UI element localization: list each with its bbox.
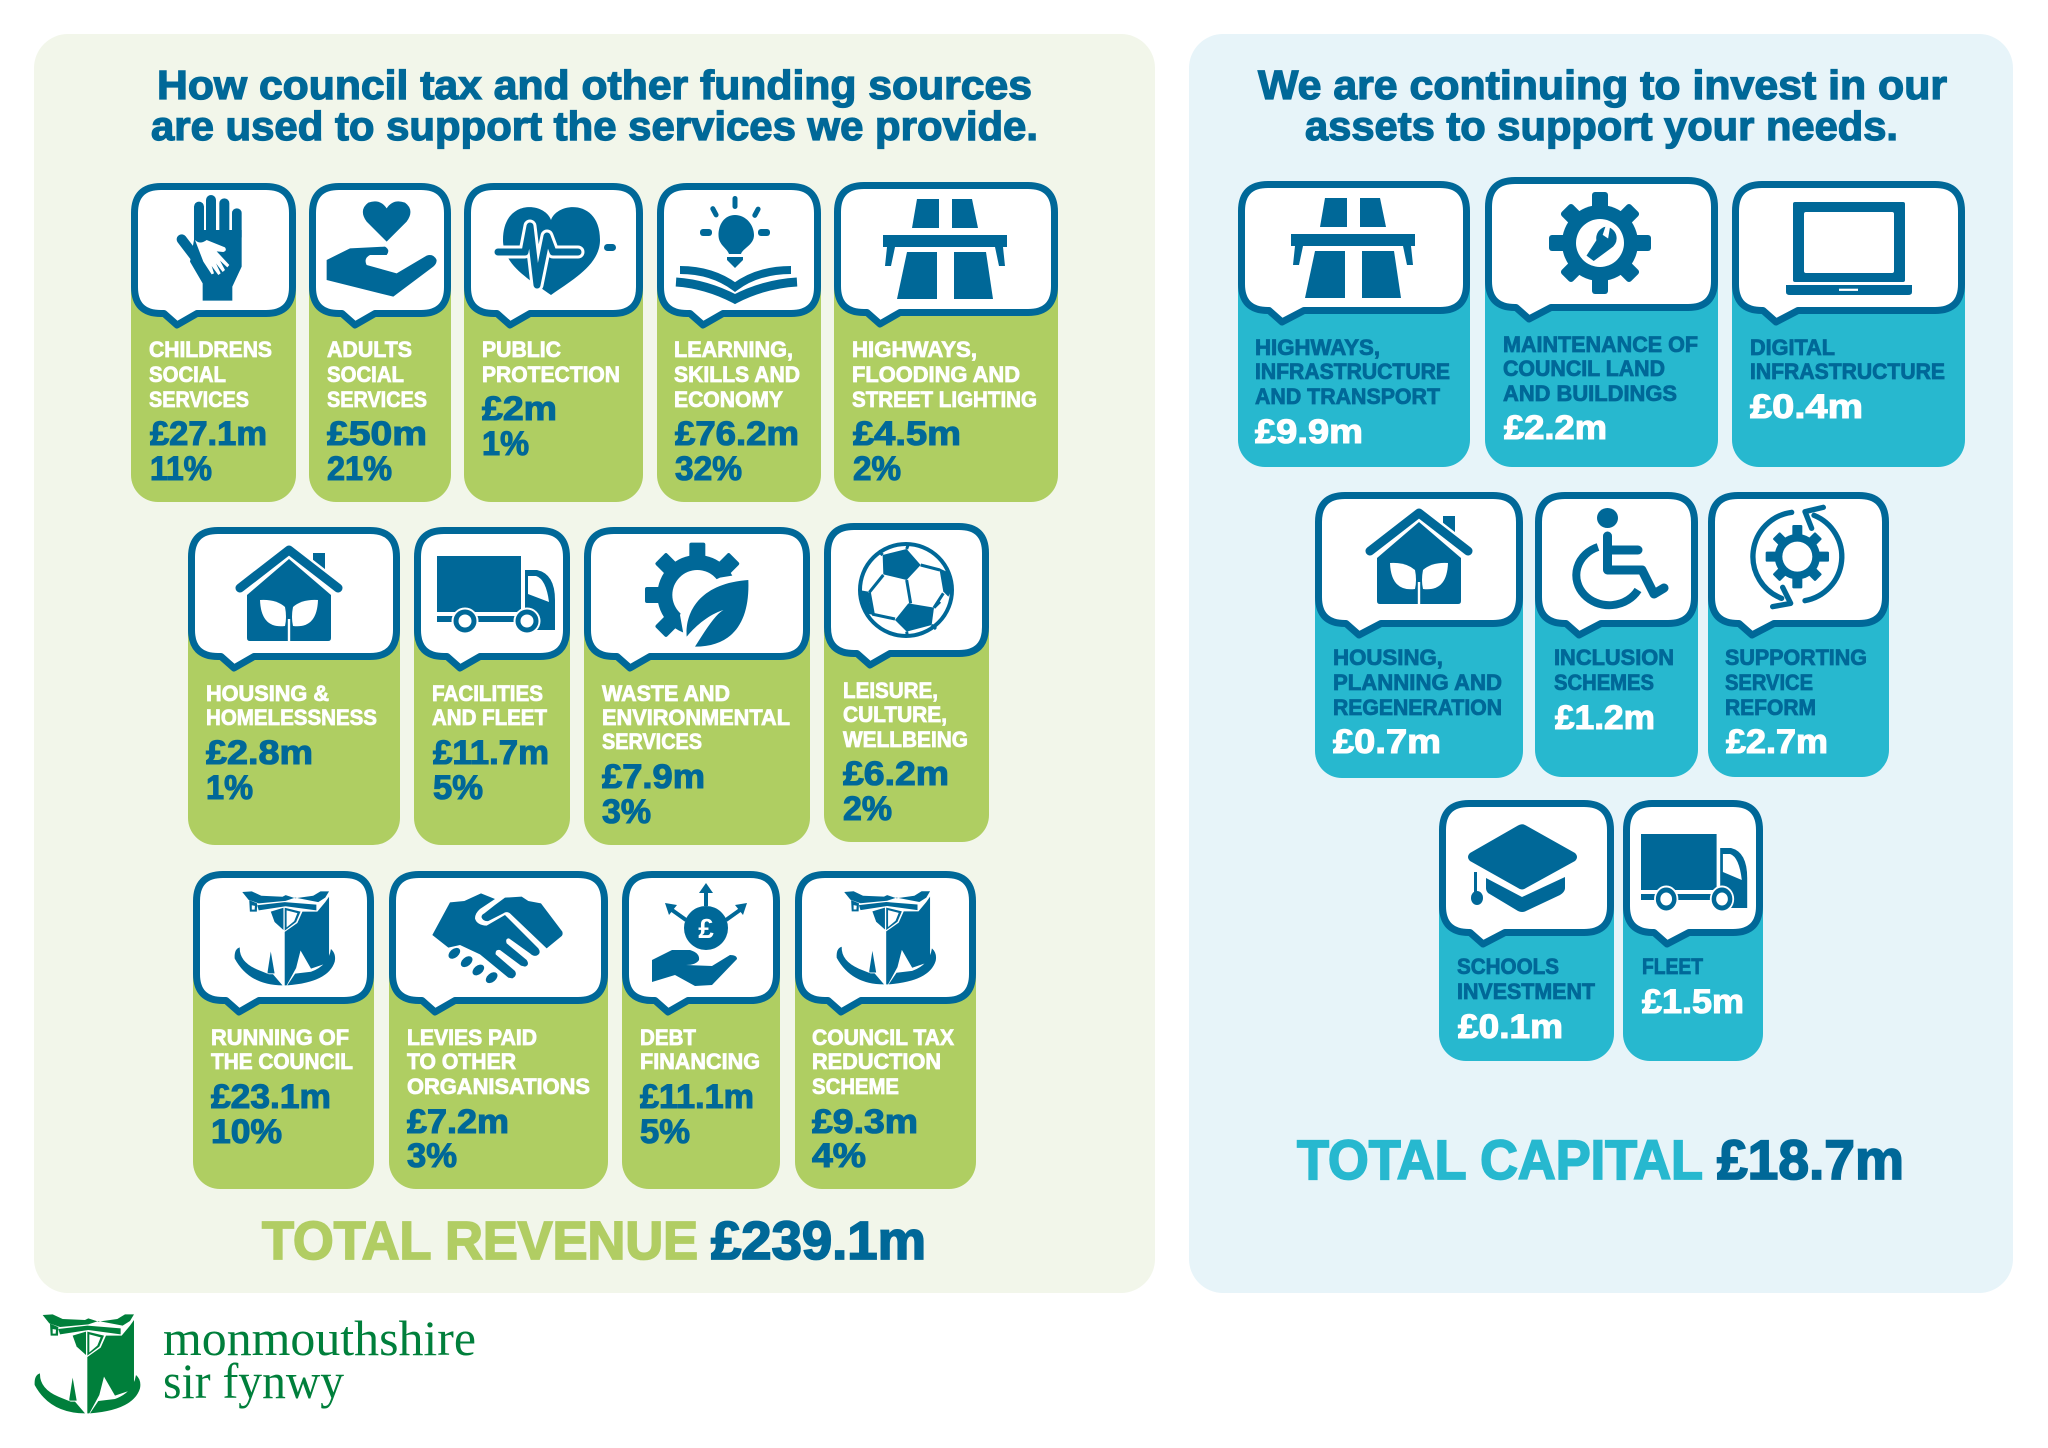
- label: AND TRANSPORT: [1255, 384, 1441, 409]
- label: THE COUNCIL: [211, 1049, 353, 1074]
- label: PLANNING AND: [1333, 670, 1502, 695]
- label: INFRASTRUCTURE: [1255, 359, 1450, 384]
- card: housing planning and regeneration: [1315, 496, 1523, 778]
- card: levies paid to other organisations: [389, 874, 608, 1189]
- label: HOMELESSNESS: [206, 705, 377, 730]
- label: PUBLIC: [482, 337, 561, 362]
- label: FLEET: [1642, 954, 1703, 979]
- icon: hands: [182, 195, 242, 301]
- total capital: TOTAL CAPITAL: [1297, 1128, 1703, 1191]
- icon: handshake: [432, 893, 563, 985]
- icon: house with plant: [240, 550, 338, 641]
- label: [432, 681, 548, 730]
- heading: capital panel: assets to support your needs.: [1305, 103, 1898, 149]
- label: AND BUILDINGS: [1503, 381, 1677, 406]
- percentage: 1%: [206, 769, 253, 807]
- label: SERVICES: [327, 387, 427, 412]
- label: HIGHWAYS,: [852, 337, 977, 362]
- icon: truck: [437, 556, 555, 634]
- heading: revenue panel: [151, 62, 1038, 149]
- amount: £11.1m: [640, 1078, 754, 1116]
- label: COUNCIL TAX: [812, 1025, 954, 1050]
- amount: £11.7m: [433, 734, 549, 772]
- label: HOUSING &: [206, 681, 329, 706]
- card: council tax reduction scheme: [795, 874, 976, 1189]
- amount: £6.2m: [843, 755, 949, 793]
- label: CHILDRENS: [149, 337, 272, 362]
- amount: £0.1m: [1458, 1008, 1563, 1046]
- percentage: 10%: [211, 1113, 282, 1151]
- icon: house with plant: [1370, 513, 1468, 604]
- total revenue: TOTAL REVENUE: [262, 1211, 698, 1271]
- logo: monmouthshire sir fynwy: [35, 1310, 476, 1413]
- label: HOUSING,: [1333, 645, 1443, 670]
- label: WELLBEING: [843, 727, 968, 752]
- card: waste and environmental services: [584, 530, 810, 845]
- percentage: 2%: [843, 790, 892, 828]
- panel: revenue services: [34, 34, 1155, 1293]
- icon: gear with wrench: [1549, 192, 1651, 294]
- label: STREET LIGHTING: [852, 387, 1037, 412]
- label: WASTE AND: [602, 681, 730, 706]
- label: LEARNING,: [674, 337, 793, 362]
- label: [482, 337, 620, 387]
- percentage: 3%: [407, 1137, 457, 1175]
- label: INFRASTRUCTURE: [1750, 359, 1945, 384]
- icon: bulb and book: [676, 196, 797, 299]
- logo wordmark: monmouthshire: [163, 1310, 476, 1366]
- heading: capital panel: We are continuing to invest in our: [1258, 62, 1947, 108]
- icon: hand with pound coin: [652, 883, 747, 986]
- label: [812, 1025, 954, 1099]
- card: debt financing: [622, 874, 780, 1189]
- icon: laptop: [1786, 202, 1912, 295]
- heading: capital panel: [1258, 62, 1947, 149]
- card: maintenance of council land and buildings: [1485, 180, 1718, 467]
- amount: £23.1m: [211, 1078, 331, 1116]
- label: LEVIES PAID: [407, 1025, 537, 1050]
- label: [1750, 335, 1945, 384]
- total revenue: £239.1m: [711, 1211, 926, 1271]
- label: [852, 337, 1037, 412]
- card: supporting service reform: [1708, 496, 1889, 777]
- label: [211, 1025, 353, 1074]
- label: [407, 1025, 590, 1099]
- label: INCLUSION: [1554, 645, 1674, 670]
- icon: council crest: [837, 891, 936, 984]
- label: [602, 681, 790, 754]
- percentage: 11%: [150, 450, 212, 488]
- label: SOCIAL: [149, 362, 226, 387]
- icon: motorway: [1291, 198, 1415, 298]
- label: [1255, 335, 1450, 409]
- card: schools investment: [1439, 804, 1614, 1061]
- label: TO OTHER: [407, 1049, 516, 1074]
- label: LEISURE,: [843, 678, 938, 703]
- amount: £7.2m: [407, 1103, 509, 1141]
- label: ORGANISATIONS: [407, 1074, 590, 1099]
- percentage: 32%: [675, 450, 742, 488]
- card: highways flooding and street lighting: [834, 186, 1058, 502]
- amount: £76.2m: [675, 415, 799, 453]
- icon: wheelchair: [1576, 508, 1664, 605]
- label: [1333, 645, 1502, 720]
- label: [843, 678, 968, 752]
- label: INVESTMENT: [1457, 979, 1596, 1004]
- amount: £1.2m: [1555, 699, 1655, 737]
- card: learning skills and economy: [657, 186, 821, 502]
- card: leisure culture wellbeing: [824, 526, 989, 842]
- label: MAINTENANCE OF: [1503, 332, 1698, 357]
- percentage: 2%: [853, 450, 901, 488]
- percentage: 5%: [640, 1113, 690, 1151]
- percentage: 4%: [812, 1137, 866, 1175]
- total capital: £18.7m: [1717, 1128, 1904, 1191]
- label: REFORM: [1725, 695, 1816, 720]
- card: childrens social services: [131, 186, 296, 502]
- amount: £2.2m: [1504, 409, 1607, 447]
- label: SCHEMES: [1554, 670, 1654, 695]
- card: fleet: [1623, 804, 1763, 1061]
- label: CULTURE,: [843, 702, 947, 727]
- label: FACILITIES: [432, 681, 543, 706]
- amount: £2m: [482, 390, 557, 428]
- amount: £0.4m: [1750, 388, 1863, 426]
- label: FINANCING: [640, 1049, 760, 1074]
- label: SKILLS AND: [674, 362, 800, 387]
- icon: gear and leaf: [645, 543, 757, 650]
- label: COUNCIL LAND: [1503, 356, 1665, 381]
- icon: heartbeat: [498, 207, 616, 295]
- icon: graduation cap: [1468, 824, 1577, 912]
- label: REDUCTION: [812, 1049, 941, 1074]
- label: ADULTS: [327, 337, 412, 362]
- label: HIGHWAYS,: [1255, 335, 1380, 360]
- label: DIGITAL: [1750, 335, 1835, 360]
- percentage: 21%: [327, 450, 392, 488]
- amount: £27.1m: [150, 415, 267, 453]
- heading: revenue panel: How council tax and other funding sources: [157, 62, 1032, 108]
- card: digital infrastructure: [1732, 184, 1965, 467]
- amount: £1.5m: [1642, 983, 1744, 1021]
- amount: £4.5m: [853, 415, 961, 453]
- icon: hand with pound coin: £: [698, 913, 714, 944]
- card: facilities and fleet: [414, 530, 570, 845]
- label: [1457, 954, 1596, 1004]
- card: public protection: [464, 186, 643, 502]
- label: [1503, 332, 1698, 406]
- label: SERVICE: [1725, 670, 1813, 695]
- percentage: 5%: [433, 769, 483, 807]
- card: inclusion schemes: [1535, 496, 1698, 777]
- amount: £2.7m: [1726, 723, 1828, 761]
- label: AND FLEET: [432, 705, 548, 730]
- card: housing and homelessness: [188, 530, 400, 845]
- label: [149, 337, 272, 412]
- total revenue: [262, 1211, 926, 1271]
- label: [674, 337, 800, 412]
- label: PROTECTION: [482, 362, 620, 387]
- label: REGENERATION: [1333, 695, 1502, 720]
- card: highways infrastructure and transport: [1238, 184, 1470, 467]
- label: SERVICES: [602, 729, 702, 754]
- panel: capital investment: [1189, 34, 2013, 1293]
- heading: revenue panel: are used to support the services we provide.: [151, 103, 1038, 149]
- logo wordmark: [163, 1310, 476, 1409]
- amount: £9.3m: [812, 1103, 918, 1141]
- amount: £0.7m: [1333, 723, 1441, 761]
- card: adults social services: [309, 186, 451, 502]
- icon: council crest: [235, 891, 335, 985]
- label: SUPPORTING: [1725, 645, 1867, 670]
- label: SCHEME: [812, 1074, 899, 1099]
- label: SOCIAL: [327, 362, 404, 387]
- icon: heart in hand: [327, 201, 437, 297]
- icon: football: [859, 544, 953, 636]
- amount: £2.8m: [206, 734, 313, 772]
- amount: £9.9m: [1255, 413, 1363, 451]
- logo crest: [35, 1314, 140, 1413]
- percentage: 1%: [482, 425, 529, 463]
- label: [640, 1025, 760, 1074]
- label: SCHOOLS: [1457, 954, 1559, 979]
- logo wordmark: sir fynwy: [163, 1353, 344, 1409]
- percentage: 3%: [602, 793, 651, 831]
- icon: motorway: [883, 199, 1007, 299]
- label: [1554, 645, 1674, 695]
- label: FLOODING AND: [852, 362, 1020, 387]
- icon: truck: [1641, 834, 1747, 912]
- label: DEBT: [640, 1025, 697, 1050]
- label: [1725, 645, 1867, 720]
- amount: £7.9m: [602, 758, 705, 796]
- label: [206, 681, 377, 730]
- label: [327, 337, 427, 412]
- amount: £50m: [327, 415, 427, 453]
- label: ENVIRONMENTAL: [602, 705, 790, 730]
- label: SERVICES: [149, 387, 249, 412]
- icon: gear with circular arrows: [1753, 507, 1842, 607]
- card: running of the council: [193, 874, 374, 1189]
- label: ECONOMY: [674, 387, 783, 412]
- label: RUNNING OF: [211, 1025, 349, 1050]
